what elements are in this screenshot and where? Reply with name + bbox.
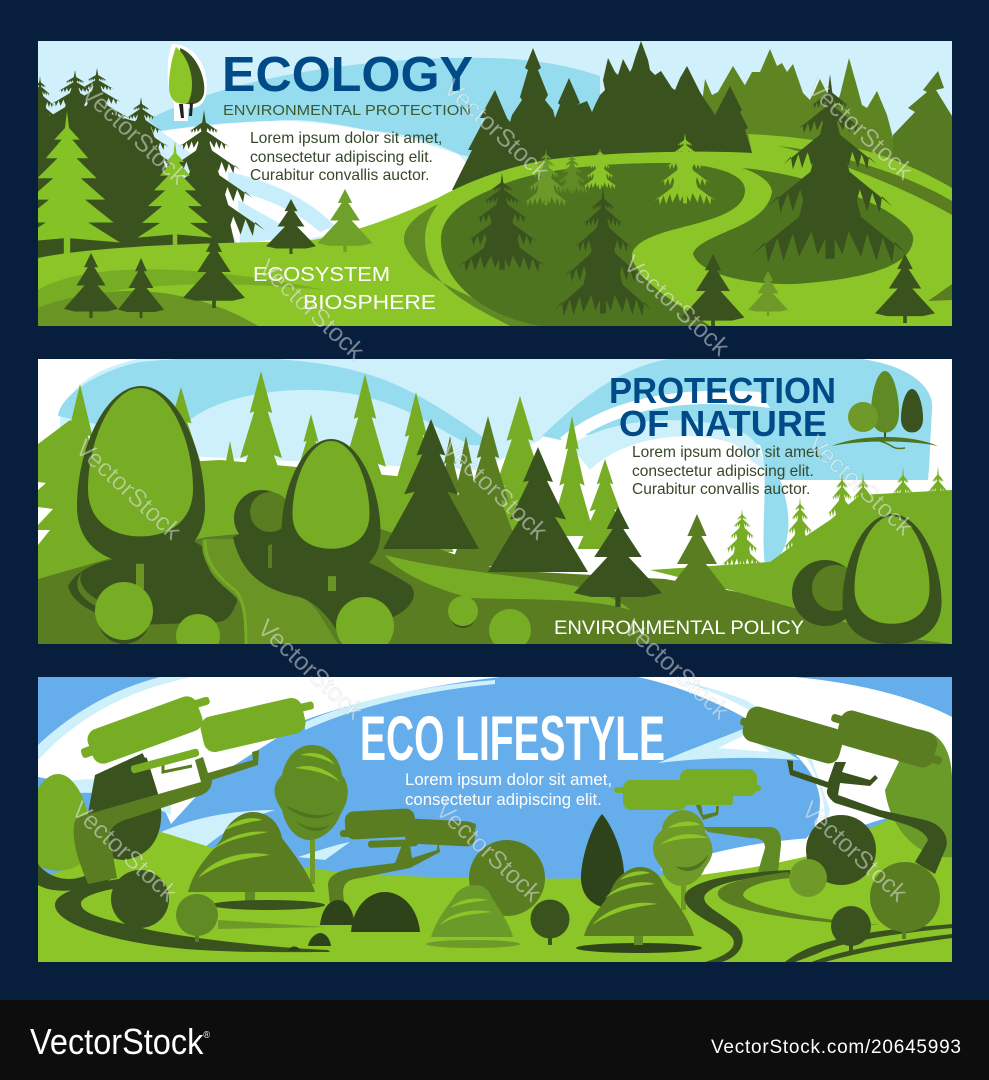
small bush back left [234, 490, 290, 568]
round trees left [111, 870, 218, 942]
foliage [80, 693, 315, 774]
layered tree right [653, 810, 712, 910]
right basin [693, 168, 913, 284]
left hill band [38, 269, 325, 310]
bright fir 1 [38, 112, 120, 254]
right lower roads [785, 924, 952, 962]
egg tree left [77, 386, 205, 589]
body text [405, 770, 612, 809]
watermarks: VectorStock [430, 796, 547, 908]
mid green fir [660, 514, 734, 614]
title: protection of nature [609, 370, 836, 444]
body text [250, 132, 441, 180]
ground [38, 790, 952, 962]
bright forest left [38, 371, 454, 579]
basin light ring [77, 572, 120, 610]
centre bonsai [328, 808, 476, 905]
body text: Lorem ipsum dolor sit amet, [405, 770, 612, 789]
small branch [163, 763, 192, 772]
watermarks: VectorStock [802, 74, 919, 186]
body text: Curabitur convallis auctor. [632, 481, 810, 498]
sky streaks [228, 172, 335, 245]
light sky [60, 359, 700, 470]
title: ECOLOGY: ECOLOGY [222, 48, 473, 102]
ground shadow bands [218, 920, 325, 929]
lower right stripe [928, 284, 952, 301]
dark forest back [452, 41, 752, 190]
watermarks: VectorStock [70, 434, 187, 546]
trunk [74, 750, 259, 884]
white base [38, 359, 952, 644]
watermarks: VectorStock [436, 434, 553, 546]
large spruce right [752, 74, 908, 263]
sky [38, 41, 952, 258]
light streak under cloud [161, 810, 350, 860]
blue band left [58, 358, 495, 446]
body text: consectetur adipiscing elit. [250, 149, 433, 166]
light band [570, 420, 765, 470]
watermarks: VectorStock [66, 796, 183, 908]
watermarks: VectorStock [796, 796, 913, 908]
basin firs [457, 173, 652, 316]
dark blob [85, 752, 161, 860]
hill basin [441, 163, 745, 326]
dark cypress [581, 814, 624, 907]
title: protection of nature: OF NATURE [619, 403, 827, 444]
bright egg [25, 774, 91, 871]
keyword labels [254, 267, 435, 309]
sky [38, 677, 952, 962]
bright egg [885, 729, 952, 857]
right dark basin [233, 520, 414, 632]
small firs [266, 189, 372, 254]
white sky right [638, 677, 952, 845]
subtitle: ENVIRONMENTAL PROTECTION [223, 102, 471, 119]
large hill [38, 134, 952, 326]
bright firs centre right [430, 396, 632, 566]
body text: consectetur adipiscing elit. [632, 463, 814, 480]
white text area [590, 436, 751, 470]
large fir far right [893, 71, 952, 200]
foliage [739, 704, 943, 770]
dark crescent [38, 864, 110, 891]
dark forest left [15, 68, 265, 258]
foreground firs [64, 236, 935, 328]
inner stripe [718, 872, 880, 925]
footer logo: VectorStock [30, 1021, 222, 1062]
light band right [660, 677, 830, 840]
left lower mound [38, 291, 258, 326]
centre right bonsai [614, 769, 781, 872]
small light fir [748, 271, 788, 316]
trunk [787, 760, 947, 874]
bonsai large left [25, 693, 315, 891]
footer url: VectorStock.com/20645993 [711, 1037, 961, 1058]
back trees right [702, 49, 893, 160]
ground [38, 529, 952, 644]
watermarks [66, 74, 919, 908]
tree logo [168, 44, 207, 121]
light ground band [385, 555, 630, 610]
white slash [847, 747, 897, 766]
light band left [38, 677, 495, 815]
watermarks: VectorStock [76, 79, 193, 191]
dark firs [383, 419, 662, 607]
body text [632, 444, 823, 498]
bright fir 2 [138, 141, 212, 246]
title: protection of nature: PROTECTION [609, 370, 836, 411]
keyword labels: BIOSPHERE [303, 292, 436, 314]
watermarks: VectorStock [438, 74, 555, 186]
small round dark tree [530, 900, 570, 945]
watermarks: VectorStock [618, 250, 735, 362]
winding path left [55, 878, 330, 952]
white notches [38, 482, 53, 545]
small mound tree [426, 885, 520, 948]
mound tree left [188, 812, 325, 910]
road stripe [205, 540, 246, 644]
footer bar [0, 1000, 989, 1080]
white streak [560, 391, 770, 445]
body text: consectetur adipiscing elit. [405, 790, 602, 809]
sky spike [658, 728, 800, 763]
dark mounds [288, 892, 420, 951]
body text: Lorem ipsum dolor sit amet, [632, 444, 823, 461]
upper right stripe [778, 146, 952, 215]
logo trees [832, 371, 938, 448]
panel: ecology banner [14, 41, 952, 328]
watermarks: VectorStock [618, 614, 735, 726]
bright forest right [650, 466, 963, 644]
white slash [142, 738, 188, 758]
title: eco lifestyle: ECO LIFESTYLE [360, 704, 665, 774]
left dark basin [68, 539, 237, 625]
body text: Curabitur convallis auctor. [250, 167, 429, 184]
round trees right [789, 815, 940, 952]
winding road [202, 539, 338, 644]
hill crescent [404, 204, 540, 326]
winding path right [685, 870, 790, 962]
egg tree right [792, 514, 942, 644]
white stripe on horizon [660, 838, 815, 875]
round tree centre [469, 840, 545, 916]
panel: protection of nature banner [38, 358, 963, 658]
panel: eco lifestyle banner [25, 677, 952, 962]
watermarks: VectorStock [802, 430, 919, 542]
watermarks: VectorStock [253, 254, 370, 366]
white cloud [161, 121, 471, 250]
layered tree [274, 745, 348, 884]
footer logo: ® [203, 1030, 211, 1041]
round bushes [95, 582, 531, 658]
blue band right [542, 359, 932, 565]
body text: Lorem ipsum dolor sit amet, [250, 130, 442, 147]
caption: ENVIRONMENTAL POLICY [554, 617, 804, 639]
white cloud left [38, 677, 500, 824]
big bonsai right [739, 704, 952, 874]
light firs on basin [523, 133, 716, 207]
egg tree centre [282, 439, 380, 591]
sky swirl [148, 58, 600, 157]
mound tree right [576, 867, 702, 953]
watermarks: VectorStock [252, 614, 369, 726]
keyword labels: ECOSYSTEM [253, 264, 390, 286]
